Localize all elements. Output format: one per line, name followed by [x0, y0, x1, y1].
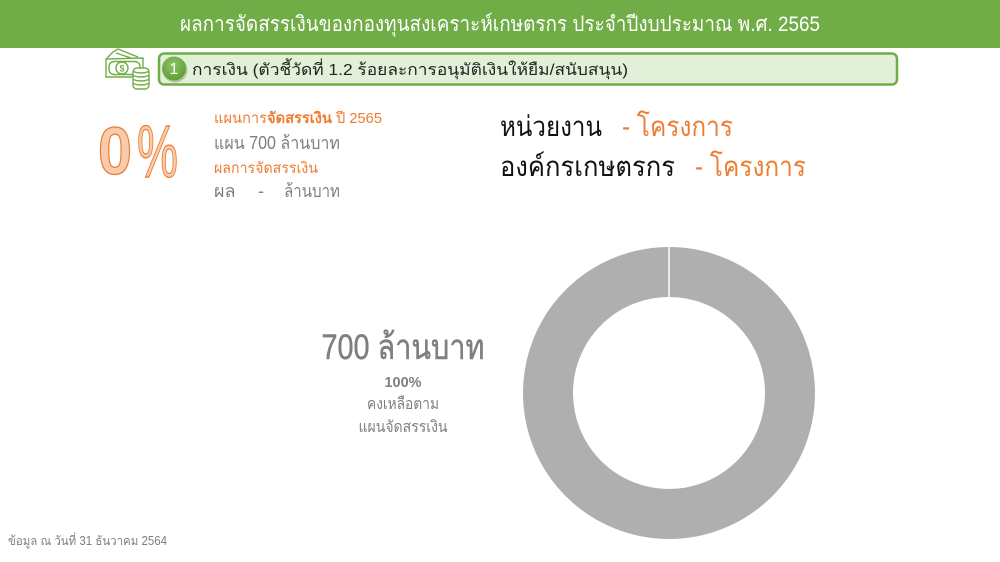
data date note: ข้อมูล ณ วันที่ 31 ธันวาคม 2564	[8, 532, 167, 549]
agency count	[500, 110, 733, 142]
big percentage: 0	[98, 114, 132, 189]
donut chart	[548, 247, 790, 514]
section bar	[159, 54, 897, 84]
plan and result text: ผล	[214, 181, 236, 201]
number badge: 1	[170, 61, 179, 78]
plan and result text: -	[258, 181, 264, 201]
icon: money and coins: $	[119, 64, 125, 74]
header banner	[0, 0, 1000, 48]
big percentage	[98, 110, 178, 193]
farmer organization count: องค์กรเกษตรกร	[500, 151, 675, 182]
plan and result text: แผน 700 ล้านบาท	[214, 133, 340, 153]
donut center label	[322, 328, 484, 436]
farmer organization count	[500, 150, 806, 182]
donut center label: แผนจัดสรรเงิน	[358, 419, 448, 436]
plan and result text: แผนการจัดสรรเงิน ปี 2565	[214, 109, 382, 127]
big percentage: %	[137, 110, 178, 193]
donut center label: 700 ล้านบาท	[322, 328, 484, 367]
donut center label: คงเหลือตาม	[367, 395, 439, 413]
icon: money and coins	[106, 49, 149, 89]
title: ผลการจัดสรรเงินของกองทุนสงเคราะห์เกษตรกร ประจำปีงบประมาณ พ.ศ. 2565	[180, 12, 820, 37]
agency count: หน่วยงาน	[500, 111, 602, 142]
plan and result text: ผลการจัดสรรเงิน	[214, 160, 318, 177]
number badge	[162, 56, 188, 82]
section heading: การเงิน (ตัวชี้วัดที่ 1.2 ร้อยละการอนุมัติเงินให้ยืม/สนับสนุน)	[192, 58, 628, 80]
donut center label: 100%	[384, 374, 422, 391]
plan and result text: ล้านบาท	[284, 181, 340, 201]
agency count: - โครงการ	[622, 110, 733, 142]
farmer organization count: - โครงการ	[695, 150, 806, 182]
plan and result text	[214, 109, 382, 201]
